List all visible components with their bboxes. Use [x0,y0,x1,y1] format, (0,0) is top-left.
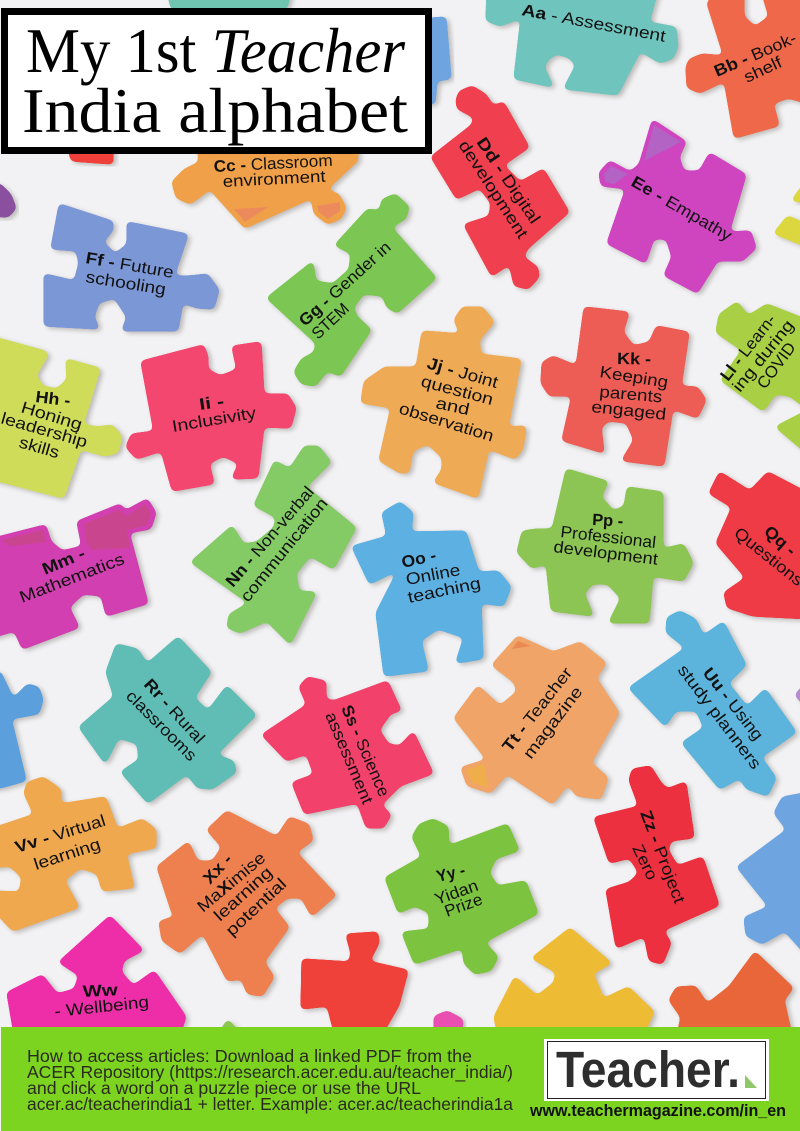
label: skills [17,434,61,462]
label [17,545,127,607]
label: Gg - Gender in [296,238,395,330]
shape [600,121,755,292]
label [54,981,150,1021]
shape [518,470,692,622]
label: Hh - [35,388,71,410]
piece: Ww Wellbeing [8,917,185,1040]
label: development [553,538,659,569]
unlabelled piece: yellow, bottom [495,929,653,1040]
shape [192,447,355,643]
label: Ll - Learn- [717,311,780,384]
shape [542,308,705,465]
label [0,388,89,462]
label: Uu - Using [699,664,767,744]
footer instructions: acer.ac/teacherindia1 + letter. Example: acer.ac/teacherindia1a [27,1094,513,1114]
shape [455,637,618,803]
label: Questions [731,524,800,590]
shape [687,0,800,137]
label: Yidan [432,877,481,909]
piece: Dd Digital development [432,87,568,288]
footer instructions: and click a word on a puzzle piece or use the URL [27,1078,421,1098]
piece: Ss Science assessment [263,678,432,827]
piece: Oo Online teaching [353,503,510,675]
label: development [455,137,532,242]
logo: Teacher: Teacher. [556,1041,740,1098]
label: question [419,372,495,409]
shape [80,638,255,802]
shape [487,0,677,94]
label: Cc - Classroom [213,152,333,176]
piece: Zz Project Zero [595,767,718,963]
piece: Qq Questions [710,473,800,618]
shape [45,205,218,330]
piece: Xx Maximise learning potential [158,812,335,995]
label: schooling [84,268,167,299]
label: Mm - [40,545,88,579]
label: Aa - Assessment [520,1,668,46]
label: leadership [0,410,89,451]
label: Kk - [617,350,651,369]
shape [263,678,432,827]
piece: Ll Learning during COVID [717,303,800,455]
shape [353,503,510,675]
piece: Ff Future schooling [45,205,218,330]
shape [595,767,718,963]
piece: Jj Joint question and observation [362,308,525,497]
label: study planners [674,662,764,773]
label [122,676,208,765]
piece: Pp Professional development [518,470,692,622]
label [455,134,544,242]
piece: Tt Teacher magazine [455,637,618,803]
shape [127,343,295,490]
label: Oo - [400,546,438,572]
label: teaching [406,574,482,607]
label: learning [32,835,103,874]
label: Vv - Virtual [13,812,108,857]
piece: Ee Empathy [600,121,755,292]
label: shelf [741,53,785,87]
label: learning [211,863,276,925]
label: Ww [82,981,118,1001]
shape [158,812,335,995]
label [321,702,393,807]
label: Zero [628,842,661,883]
title: My 1st Teacher [26,16,405,86]
piece: Bb Bookshelf [687,0,800,137]
label [13,812,108,874]
title: India alphabet [22,76,409,146]
footer instructions [27,1046,513,1114]
label: COVID [754,339,800,392]
piece: Ii Inclusivity [127,343,295,490]
label: ing during [729,317,798,396]
piece: Uu Using study planners [630,612,795,795]
footer instructions: How to access articles: Download a linked PDF from the [27,1046,472,1066]
footer instructions: ACER Repository (https://research.acer.edu.au/teacher_india/) [27,1062,513,1083]
label: engaged [591,398,667,424]
label: Xx - [200,851,236,888]
label: Tt - Teacher [499,664,577,755]
piece: Nn Non-verbal communication [192,447,355,643]
label [553,511,659,569]
label [171,393,258,436]
label: Bb - Book- [711,29,799,81]
label: communication [237,495,332,606]
label: Dd - Digital [473,134,544,227]
shape [630,612,795,795]
label: Rr - Rural [140,676,208,747]
label: Online [404,561,462,589]
piece: Cc Classroom environment [173,130,357,227]
shape [173,130,357,227]
label [717,311,800,396]
shape [432,87,568,288]
label: parents [599,383,663,406]
label: Zz - Project [636,808,688,906]
piece: Yy Yidan Prize [386,820,537,973]
label: Ee - Empathy [628,173,736,245]
label: Qq - [760,522,799,560]
label: Ff - Future [84,249,175,282]
title [4,12,428,150]
shape [0,500,155,648]
label: assessment [321,710,376,807]
label: Keeping [598,363,669,392]
shape [386,820,537,973]
shape [717,303,800,455]
unlabelled piece: orange, bottom right [670,953,792,1040]
label: Prize [442,891,485,921]
label: Ss - Science [337,702,393,800]
label: observation [397,400,496,445]
piece: Rr Rural classrooms [80,638,255,802]
label: Inclusivity [171,404,258,436]
label [213,152,333,191]
piece: Kk Keeping parents engaged [542,308,705,465]
label: classrooms [122,687,200,765]
shape [710,473,800,618]
label: Pp - [592,511,624,531]
shape [362,308,525,497]
shape [268,195,435,385]
label: Honing [19,399,84,434]
label: Nn - Non-verbal [222,483,318,591]
piece: Aa Assessment [487,0,677,94]
label: potential [222,875,290,940]
label [397,355,500,445]
label [194,849,290,940]
shape [0,778,155,930]
label: and [434,394,471,419]
label: STEM [308,300,353,343]
label: Mathematics [17,550,127,607]
piece: Mm Mathematics [0,500,155,648]
piece: Hh Honing leadership skills [0,337,121,497]
label: Professional [560,523,657,552]
label [400,546,482,607]
label: Ii - [198,393,225,414]
shape [0,337,121,497]
label: MaXimise [194,849,269,916]
unlabelled piece: blue, right edge [738,793,800,958]
label [499,664,586,762]
label: Jj - Joint [425,355,500,392]
label: environment [222,168,327,191]
label [591,350,669,424]
unlabelled piece: red, bottom [302,933,407,1040]
shape [8,917,185,1040]
label: Yy - [435,861,467,886]
label [432,861,485,921]
piece: Vv Virtual learning [0,778,155,930]
label: - Wellbeing [54,993,150,1021]
label: magazine [520,683,586,762]
label [84,249,175,299]
website URL: www.teachermagazine.com/in_en [529,1101,786,1120]
piece: Gg Gender in STEM [268,195,435,385]
footer band [1,1027,800,1131]
